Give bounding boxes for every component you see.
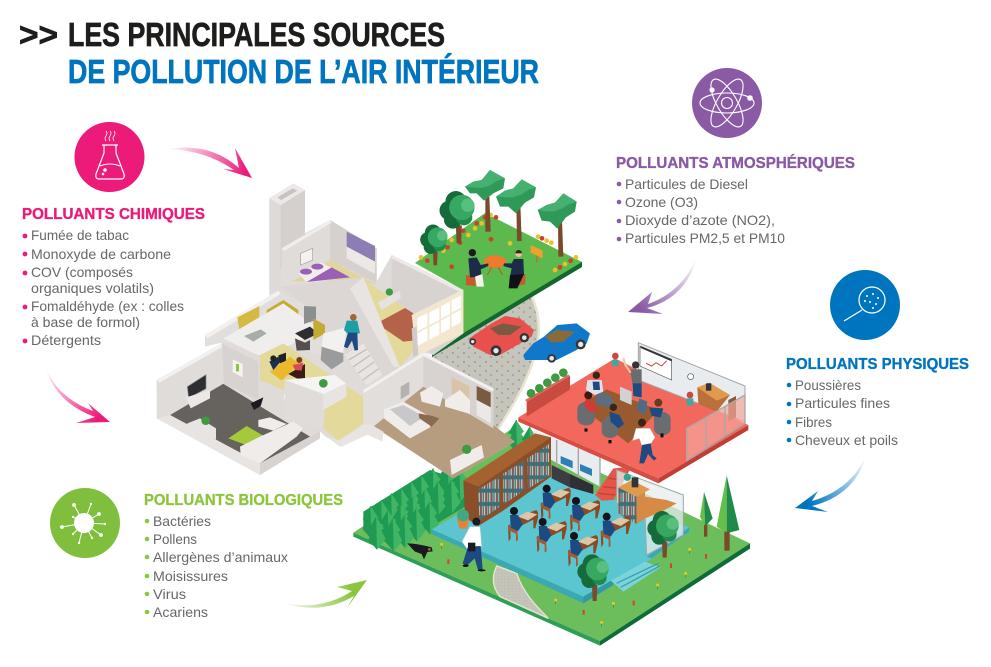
bedroom [282, 220, 377, 293]
bathroom [361, 353, 515, 478]
students at desks [508, 485, 631, 567]
large window [412, 289, 463, 357]
house silhouette [157, 183, 515, 478]
garden blocky trees [465, 170, 577, 257]
list biologiques: Virus [153, 586, 186, 602]
side bookshelves and glass [617, 470, 683, 555]
lawn [415, 213, 582, 357]
dining table [269, 353, 305, 381]
man in white shirt [633, 419, 657, 463]
bookshelves [463, 433, 551, 526]
arrow: blue [795, 456, 866, 512]
red staircase [595, 467, 632, 501]
list biologiques: Moisissures [153, 568, 228, 584]
garden with trees and people [415, 170, 582, 357]
corner wall [285, 375, 347, 430]
panel: polluants physiques [786, 270, 969, 448]
lower yellow hall [260, 343, 370, 447]
arrow: purple [628, 257, 697, 314]
kitchen [205, 291, 347, 369]
list biologiques: Acariens [153, 604, 208, 620]
list atmosphériques: Particules PM2,5 et PM10 [625, 230, 785, 246]
list chimiques: Fomaldéhyde (ex : colles [31, 298, 184, 314]
low wall with planter [525, 368, 570, 417]
title line 1: LES PRINCIPALES SOURCES [68, 16, 445, 53]
presenter [623, 358, 642, 397]
list atmosphériques [617, 176, 785, 246]
list atmosphériques: Particules de Diesel [625, 176, 748, 192]
panel: polluants biologiques [50, 488, 343, 620]
living room rug and sofa [187, 392, 303, 463]
icon: magnifier [830, 270, 900, 340]
list atmosphériques: Dioxyde d’azote (NO2), [625, 212, 775, 228]
list chimiques: Détergents [31, 332, 101, 348]
list chimiques [23, 227, 184, 348]
panel: polluants atmosphériques [616, 68, 855, 246]
deck planter [450, 445, 484, 475]
icon: red car [469, 316, 534, 356]
central stair wall [280, 277, 400, 377]
lawn flowers [440, 543, 707, 627]
chimney [269, 183, 305, 290]
dog [407, 543, 433, 559]
garden round trees [420, 191, 475, 265]
house [157, 183, 515, 478]
list chimiques: COV (composés [31, 264, 133, 280]
list biologiques: Bactéries [153, 513, 211, 529]
heading biologiques: POLLUANTS BIOLOGIQUES [144, 492, 343, 509]
pine hedge [363, 420, 539, 551]
list chimiques: organiques volatils) [31, 280, 154, 296]
heading atmosphériques: POLLUANTS ATMOSPHÉRIQUES [616, 155, 855, 172]
front glass wall [687, 395, 745, 461]
list biologiques [145, 513, 288, 620]
potted plants [612, 353, 693, 406]
two men at a table [466, 249, 525, 288]
list chimiques: Fumée de tabac [31, 227, 129, 243]
sign [531, 245, 543, 262]
arrow: pink top [167, 148, 252, 178]
road [432, 297, 539, 432]
arrow: pink bottom [45, 367, 110, 423]
cars [469, 316, 590, 363]
list chimiques: à base de formol) [31, 314, 140, 330]
living room [157, 343, 320, 475]
back glass wall and computers [533, 430, 600, 494]
meeting table and workers [577, 372, 671, 443]
red office plate [518, 358, 748, 483]
list atmosphériques: Ozone (O3) [625, 194, 698, 210]
man walking [462, 518, 486, 571]
list physiques: Poussières [795, 377, 861, 393]
list physiques: Fibres [795, 414, 832, 430]
icon: atom [692, 68, 762, 138]
round trees [577, 511, 679, 601]
heading chimiques: POLLUANTS CHIMIQUES [22, 206, 205, 223]
icon: flask [74, 122, 144, 192]
office floor [518, 343, 748, 483]
list physiques [787, 377, 898, 448]
title [19, 16, 539, 90]
list physiques: Particules fines [795, 395, 890, 411]
man on stairs [344, 314, 360, 351]
flower beds [419, 213, 578, 272]
stairs [345, 343, 382, 385]
icon: blue car [523, 323, 590, 363]
arrow: green [280, 580, 367, 608]
panel: polluants chimiques [22, 122, 205, 348]
list chimiques: Monoxyde de carbone [31, 246, 171, 262]
teal classroom floor [432, 470, 689, 603]
classroom floor with garden [353, 420, 750, 646]
heading physiques: POLLUANTS PHYSIQUES [786, 356, 969, 373]
list biologiques: Allergènes d’animaux [153, 549, 288, 565]
title line 2: DE POLLUTION DE L’AIR INTÉRIEUR [68, 53, 539, 90]
upper yellow hall [367, 255, 463, 367]
icon: virus [50, 488, 120, 558]
list biologiques: Pollens [153, 531, 197, 547]
conifers right [700, 475, 739, 551]
glass back wall and whiteboard [638, 343, 745, 422]
plant pot [457, 509, 469, 529]
list physiques: Cheveux et poils [795, 432, 898, 448]
title chevrons: >> [19, 16, 58, 53]
lawn plate [353, 430, 750, 646]
